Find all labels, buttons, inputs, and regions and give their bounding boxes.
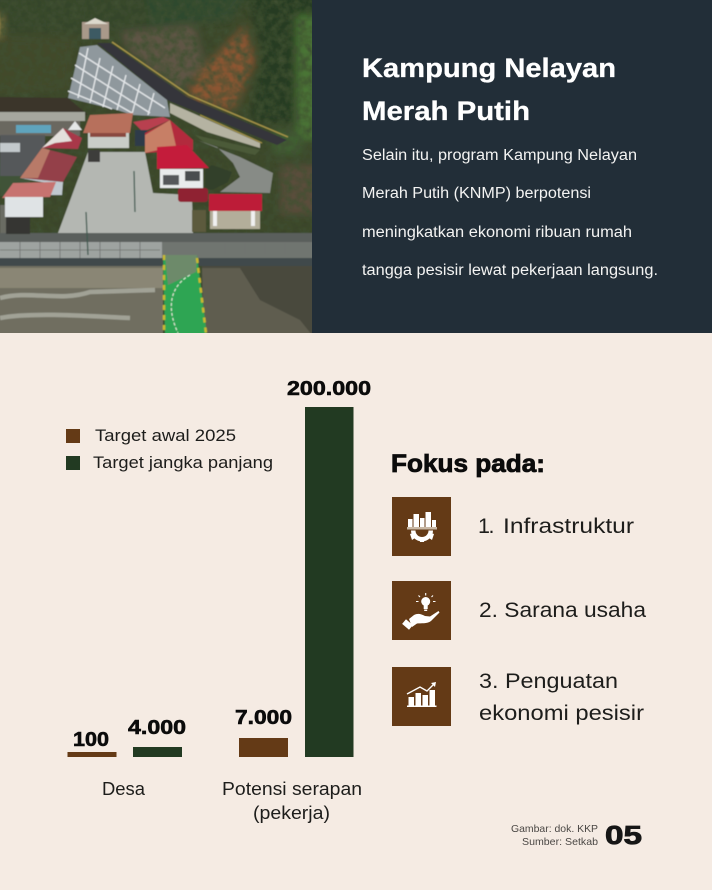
heading xyxy=(362,53,616,126)
intro text: Merah Putih (KNMP) berpotensi xyxy=(362,185,591,202)
heading: focus: Fokus pada: xyxy=(391,450,545,478)
bar chart: 7.000 xyxy=(235,707,292,729)
source credits: Sumber: Setkab xyxy=(522,836,598,848)
intro text: tangga pesisir lewat pekerjaan langsung. xyxy=(362,262,658,279)
focus item 1: Infrastruktur xyxy=(503,514,634,538)
bar chart: Desa xyxy=(102,779,146,799)
focus item 2 xyxy=(392,581,646,640)
bar chart: (pekerja) xyxy=(253,803,330,823)
bar chart: Potensi serapan xyxy=(222,779,362,799)
source credits xyxy=(511,823,598,848)
page number: 05 xyxy=(605,820,642,850)
icon: hand with light bulb xyxy=(402,593,440,630)
blurred vegetation xyxy=(0,0,330,215)
panel: dark intro xyxy=(312,0,712,333)
focus item 2: 2. Sarana usaha xyxy=(479,598,646,622)
focus item 3: ekonomi pesisir xyxy=(479,701,644,725)
focus item 1 xyxy=(392,497,634,556)
shore and water xyxy=(0,266,163,336)
green pier xyxy=(163,255,207,336)
paved road right xyxy=(197,140,273,193)
source credits: Gambar: dok. KKP xyxy=(511,823,598,835)
legend: Target jangka panjang xyxy=(93,454,273,472)
plaza xyxy=(58,152,193,233)
bar chart: 100 xyxy=(73,729,109,751)
focus item 3: 3. Penguatan xyxy=(479,669,618,693)
focus item 3 xyxy=(392,667,644,726)
intro text: meningkatkan ekonomi ribuan rumah xyxy=(362,224,632,241)
heading: Kampung Nelayan xyxy=(362,53,616,83)
road and gate xyxy=(97,43,287,145)
intro text xyxy=(362,147,658,279)
panel: aerial photo of fishing village xyxy=(0,0,312,333)
promenade xyxy=(0,233,317,242)
legend xyxy=(66,427,273,472)
focus item 1: 1. xyxy=(478,514,493,538)
buildings xyxy=(83,113,133,133)
ground behind village xyxy=(0,97,88,115)
icon: growth chart xyxy=(407,682,436,707)
bar chart xyxy=(68,378,371,823)
bar chart: 4.000 xyxy=(128,717,186,739)
retaining wall xyxy=(68,45,170,117)
legend: Target awal 2025 xyxy=(95,427,236,445)
intro text: Selain itu, program Kampung Nelayan xyxy=(362,147,637,164)
heading: Merah Putih xyxy=(362,96,530,126)
bar chart: 200.000 xyxy=(287,378,371,400)
icon: city on gear xyxy=(407,512,437,542)
lamp posts xyxy=(86,171,135,255)
